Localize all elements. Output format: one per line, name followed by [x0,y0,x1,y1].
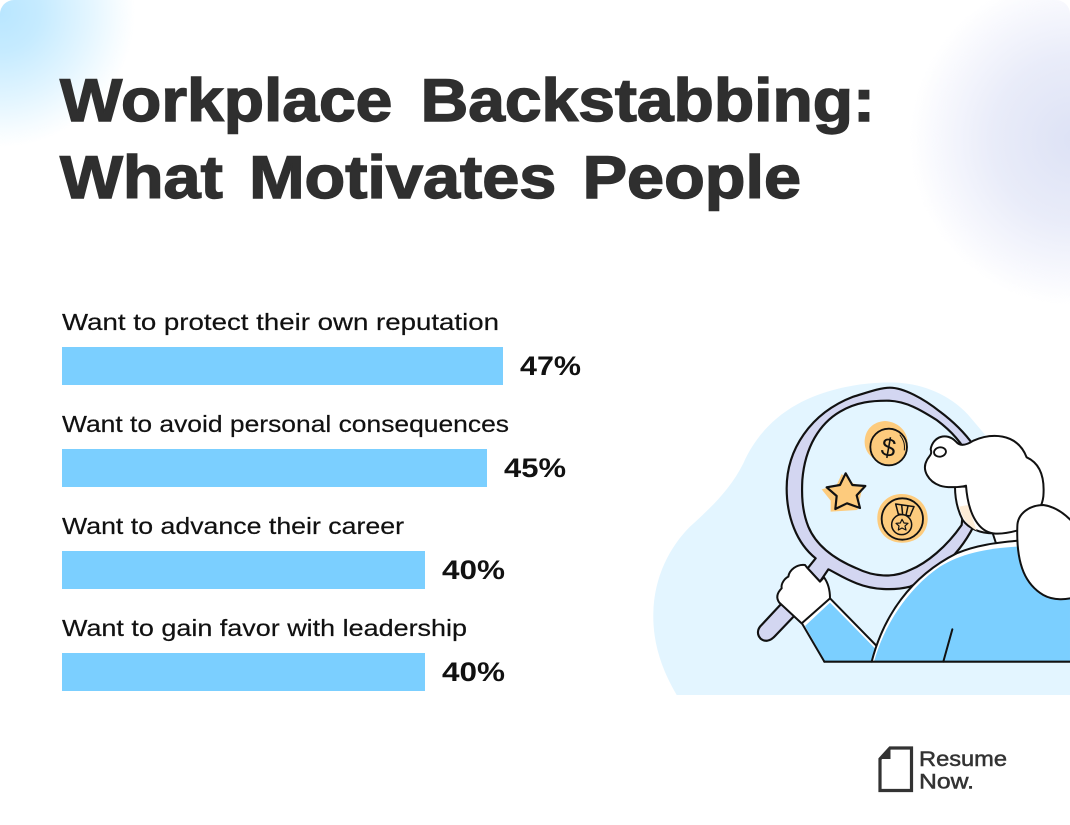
bar row: leadership 40%: 40% [442,657,505,687]
bar chart [62,309,581,691]
icon: medal coin [877,494,928,543]
body [872,541,1070,662]
pale blue blob backdrop [653,383,1070,695]
bar row: leadership 40% [62,615,505,691]
bar row: leadership 40%: Want to gain favor with leadership [62,615,467,641]
bar row: reputation 47%: Want to protect their own reputation [62,309,499,335]
bar row: career 40%: 40% [442,555,505,585]
logo wordmark [919,748,1007,794]
icon: star [822,473,865,512]
hair top [925,436,1044,534]
title: What Motivates People [60,144,801,211]
logo: Resume Now [879,747,1007,794]
illustration: person with magnifying glass [653,383,1070,695]
title [60,67,875,211]
magnifier ring [787,388,977,589]
hand [777,565,830,623]
bar row: career 40% [62,513,505,589]
face shadow [959,505,977,531]
icon: document fold [879,747,890,759]
face [955,487,1000,533]
title: Workplace Backstabbing: [60,67,875,134]
magnifier handle [758,602,798,641]
bar row: career 40%: Want to advance their career [62,513,404,539]
icon: dollar coin: $ [879,431,899,463]
logo wordmark: Resume [919,748,1007,771]
bar row: consequences 45% [62,411,566,487]
bar row: reputation 47% [62,309,581,385]
icon: dollar coin [865,421,908,465]
logo wordmark: Now. [919,770,974,794]
table line [824,658,1070,665]
bar row: consequences 45%: Want to avoid personal consequences [62,411,509,437]
magnifier lens [802,401,968,575]
ear loop [933,446,947,458]
neck [992,527,1020,543]
hair bun [1017,505,1070,599]
icon: document [880,748,912,790]
bar row: consequences 45%: 45% [504,453,566,483]
bar row: reputation 47%: 47% [520,351,581,381]
sleeve [802,598,877,662]
